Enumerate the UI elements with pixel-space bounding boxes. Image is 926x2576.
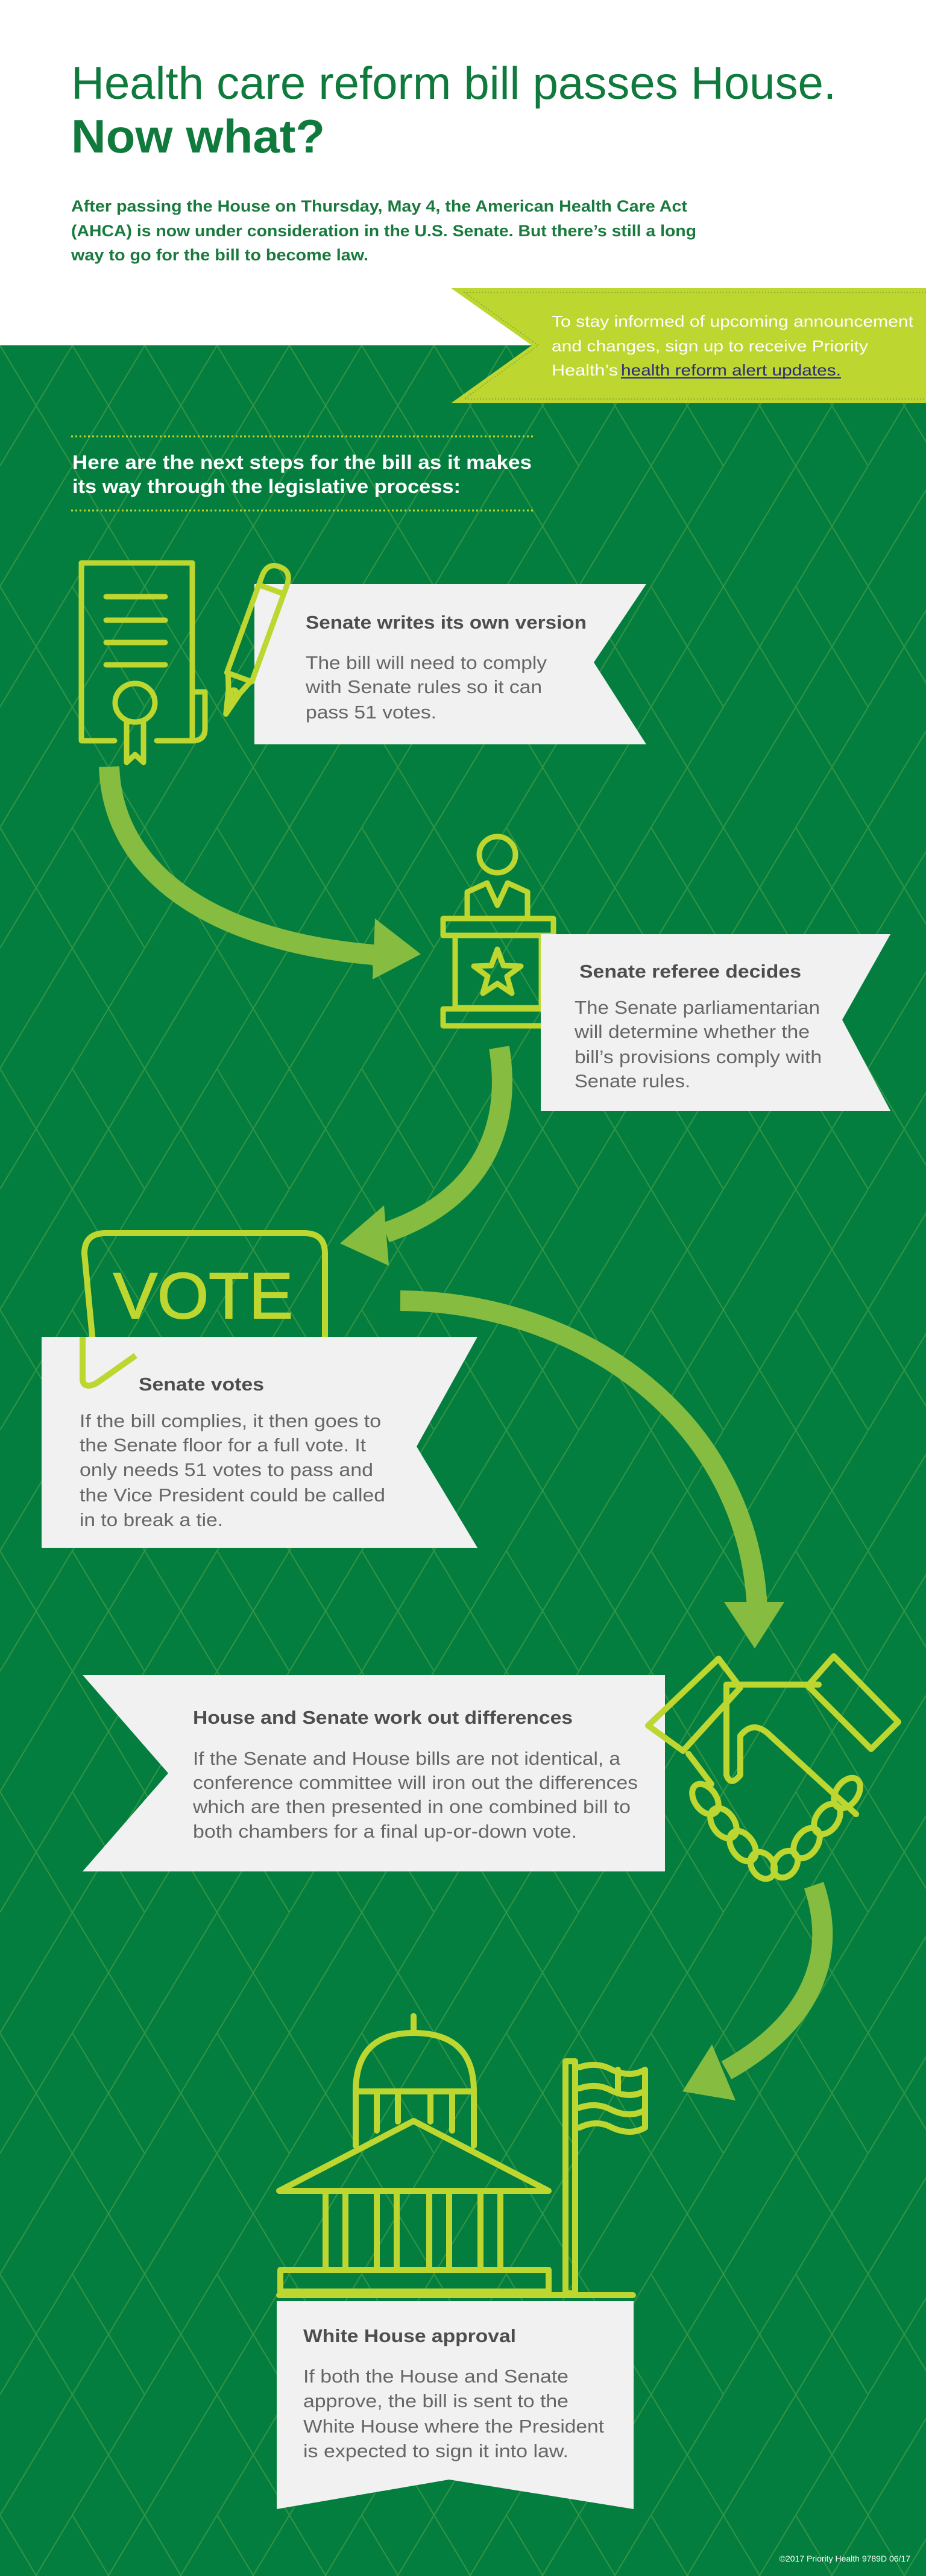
callout: Senate referee decides: Senate referee decides: [579, 961, 801, 982]
callout: Senate writes its own version: The bill will need to comply: [306, 652, 547, 673]
arrow 4: [682, 1885, 822, 2100]
icon: handshake: [648, 1656, 898, 1883]
callout banner: alert updates: and changes, sign up to receive Priority: [552, 337, 868, 355]
arrow 3: [400, 1301, 784, 1648]
callout: Senate votes: the Vice President could be called: [80, 1484, 385, 1506]
intro paragraph: [71, 197, 696, 264]
icon: document with seal and pen: [81, 562, 292, 762]
callout banner: alert updates: To stay informed of upcoming announcement: [552, 312, 914, 330]
callout: Senate votes: only needs 51 votes to pass and: [80, 1459, 373, 1480]
callout: House and Senate work out differences: both chambers for a final up-or-down vote.: [193, 1821, 577, 1842]
icon: VOTE speech bubble: [84, 1233, 325, 1385]
arrow 1: [109, 767, 421, 979]
icon: podium with speaker: [443, 837, 553, 1026]
callout: Senate referee decides: will determine whether the: [574, 1021, 810, 1042]
callout: Senate writes its own version: with Senate rules so it can: [305, 676, 542, 697]
callout: Senate referee decides: [541, 934, 890, 1111]
callout: Senate writes its own version: Senate writes its own version: [306, 612, 587, 633]
callout: Senate writes its own version: pass 51 votes.: [306, 702, 436, 723]
footer credit: ©2017 Priority Health 9789D 06/17: [780, 2554, 910, 2563]
callout: White House approval: If both the House and Senate: [303, 2366, 569, 2387]
callout banner: alert updates: health reform alert updates.: [621, 361, 841, 379]
intro paragraph: (AHCA) is now under consideration in the U.S. Senate. But there’s still a long: [71, 222, 696, 240]
arrow 2: [340, 1048, 502, 1266]
callout: White House approval: White House approval: [303, 2325, 516, 2346]
callout: House and Senate work out differences: If the Senate and House bills are not identical, a: [193, 1748, 621, 1769]
callout banner: alert updates: [451, 288, 926, 403]
callout banner: alert updates: Health’s: [552, 361, 618, 379]
callout: House and Senate work out differences: [83, 1675, 665, 1871]
subheading: Here are the next steps for the bill as it makes: [72, 451, 532, 473]
callout: House and Senate work out differences: which are then presented in one combined bill to: [192, 1796, 631, 1817]
callout: Senate votes: the Senate floor for a full vote. It: [80, 1434, 366, 1456]
callout: Senate votes: If the bill complies, it then goes to: [80, 1410, 381, 1431]
callout: Senate votes: [42, 1337, 477, 1548]
title: Health care reform bill passes House.: [71, 58, 836, 109]
icon: capitol building and flag: [279, 2016, 645, 2295]
callout: Senate referee decides: Senate rules.: [575, 1070, 690, 1092]
icon: VOTE speech bubble: VOTE: [113, 1259, 293, 1332]
intro paragraph: After passing the House on Thursday, May 4, the American Health Care Act: [71, 197, 687, 215]
callout: Senate writes its own version: [254, 584, 646, 744]
subheading: [71, 436, 535, 510]
callout: White House approval: approve, the bill is sent to the: [303, 2390, 569, 2411]
callout: Senate referee decides: bill’s provisions comply with: [575, 1046, 822, 1067]
callout: White House approval: White House where the President: [303, 2416, 604, 2437]
callout: House and Senate work out differences: conference committee will iron out the differences: [193, 1772, 638, 1793]
callout: White House approval: [277, 2301, 634, 2509]
callout: Senate votes: in to break a tie.: [80, 1509, 223, 1530]
title: Now what?: [71, 110, 325, 163]
callout: Senate referee decides: The Senate parliamentarian: [575, 997, 820, 1018]
subheading: its way through the legislative process:: [72, 476, 461, 497]
intro paragraph: way to go for the bill to become law.: [71, 246, 368, 264]
callout: Senate votes: Senate votes: [139, 1374, 264, 1395]
callout: House and Senate work out differences: House and Senate work out differences: [193, 1707, 573, 1728]
callout: White House approval: is expected to sign it into law.: [303, 2440, 569, 2461]
title: [71, 58, 836, 163]
